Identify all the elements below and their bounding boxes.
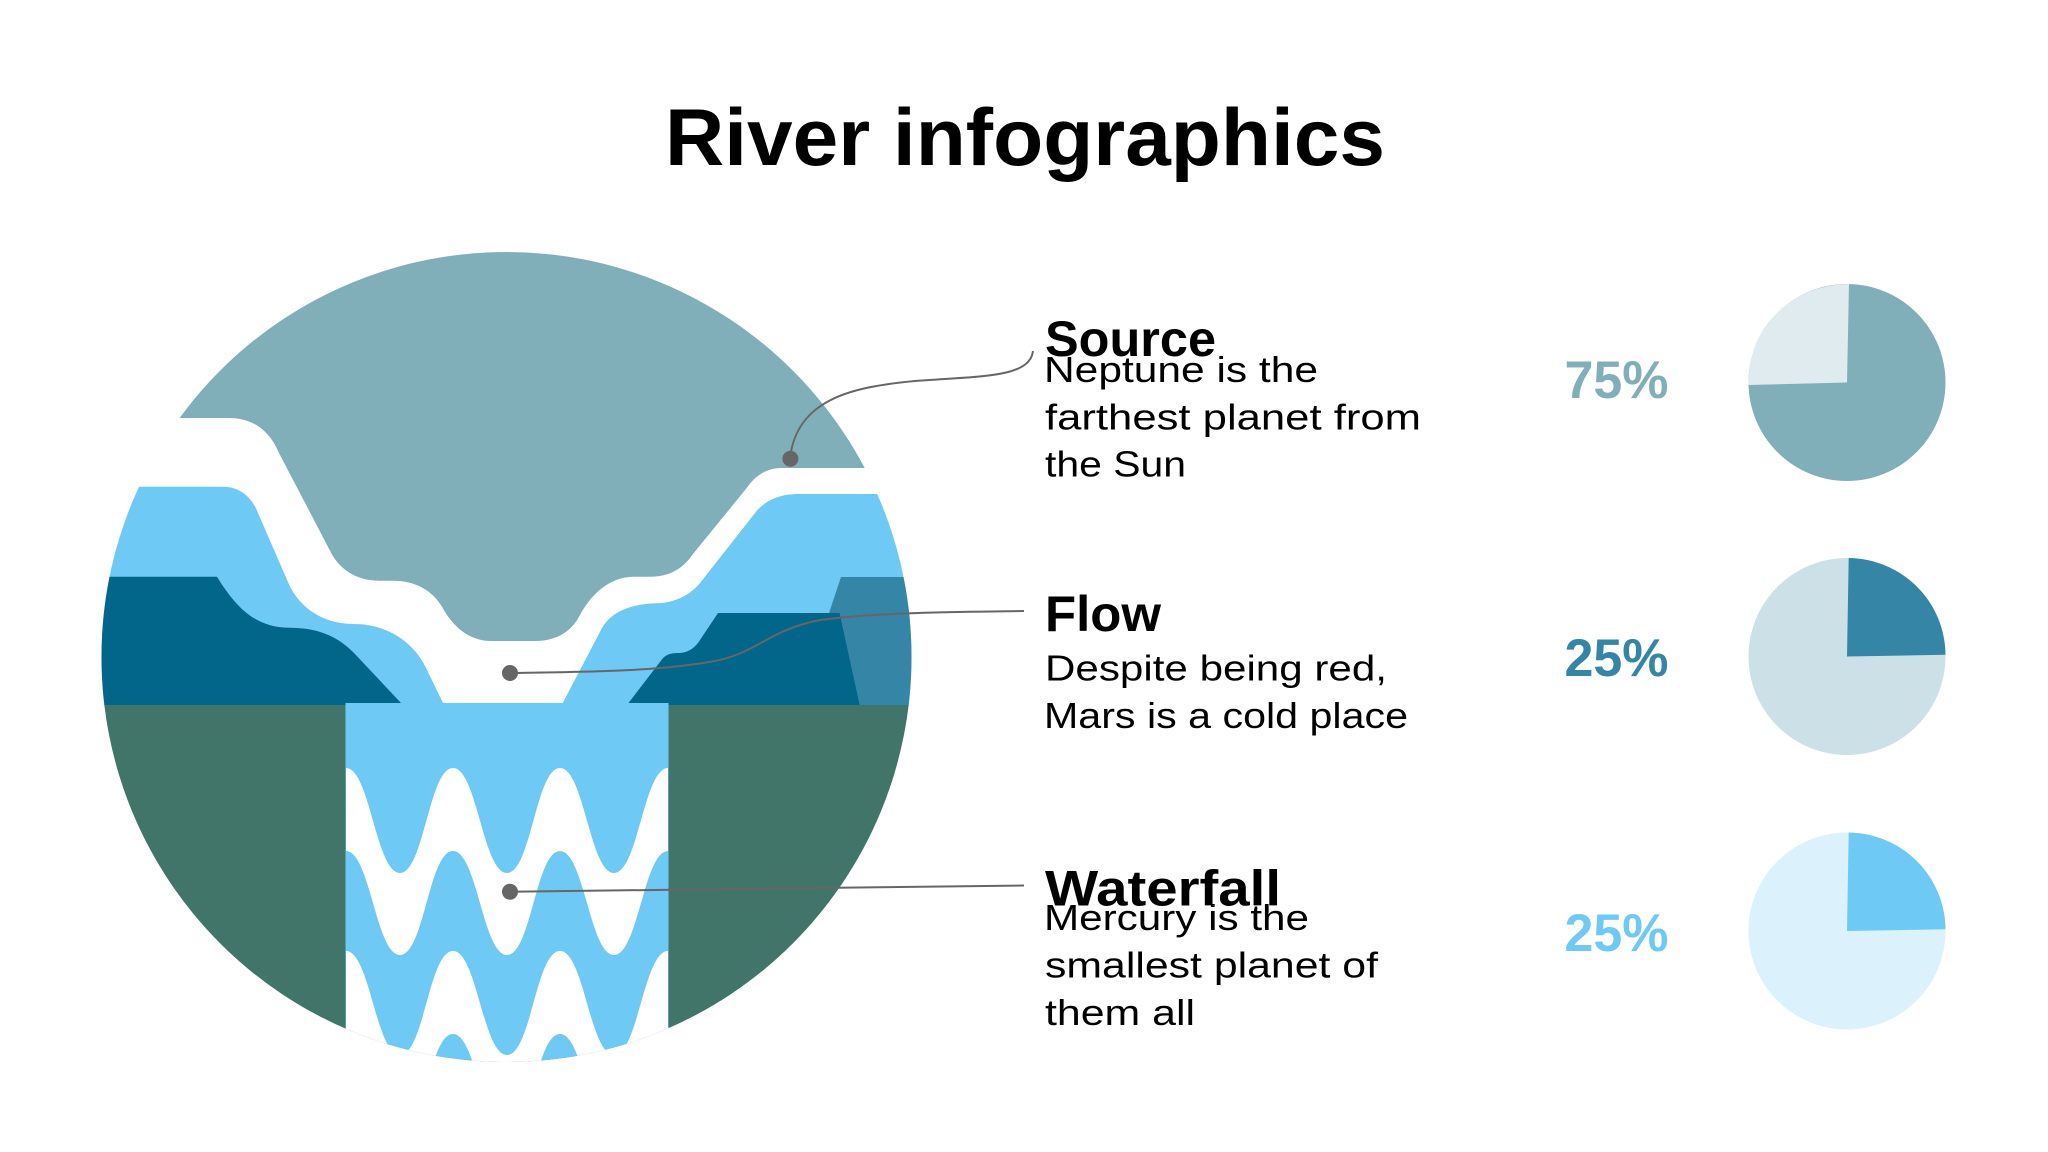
percentage: 25% flow: 25%: [1564, 629, 1668, 688]
text block: flow: Despite being red,: [1045, 648, 1387, 688]
sky / source area: [180, 252, 865, 641]
text block: waterfall: Mercury is the: [1044, 897, 1309, 938]
title: River infographics: [665, 93, 1385, 183]
waterfall: [346, 703, 668, 1062]
pie chart: 25% flow: [1748, 558, 1946, 755]
text block: source: the Sun: [1045, 444, 1186, 485]
left dark hill: [90, 577, 401, 706]
connector: waterfall: [502, 884, 1024, 900]
text block: flow: Mars is a cold place: [1044, 695, 1408, 736]
text block: source: [1044, 311, 1421, 485]
text block: waterfall: smallest planet of: [1045, 944, 1379, 986]
waterfall white band lower: [346, 951, 668, 1062]
green cliffs: [90, 705, 930, 1075]
text block: source: farthest planet from: [1045, 396, 1421, 437]
waterfall white band upper: [346, 768, 668, 955]
text block: flow: Flow: [1045, 586, 1161, 642]
connector: source: [782, 351, 1033, 467]
text block: waterfall: [1044, 860, 1379, 1033]
connector: flow: [502, 611, 1024, 681]
text block: waterfall: them all: [1045, 992, 1195, 1033]
text block: source: Neptune is the: [1044, 349, 1318, 390]
river illustration: [102, 252, 912, 1062]
text block: flow: [1044, 586, 1408, 736]
percentage: 25% waterfall: 25%: [1564, 904, 1668, 963]
pie chart: 75%: [1748, 284, 1946, 481]
river banks light blue: [90, 487, 930, 706]
text block: source: Source: [1045, 311, 1216, 367]
text block: waterfall: Waterfall: [1045, 860, 1281, 916]
percentage: 75%: 75%: [1564, 351, 1668, 410]
right mid-blue hill: [829, 577, 912, 706]
right dark hill: [628, 613, 860, 706]
pie chart: 25% waterfall: [1748, 832, 1946, 1030]
